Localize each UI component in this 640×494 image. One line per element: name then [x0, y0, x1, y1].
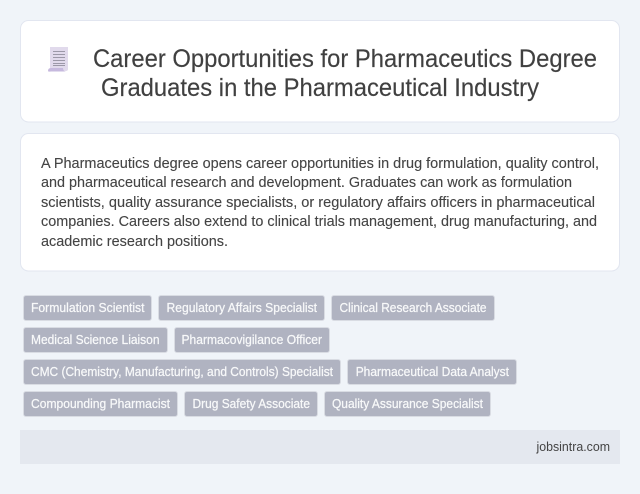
text block: description: academic research positions. — [41, 233, 228, 250]
text block: description: scientists, quality assurance specialists, or regulatory affairs officers in pharmaceutical — [41, 194, 595, 211]
tag: Clinical Research Associate: Clinical Research Associate — [340, 300, 486, 315]
tag: Pharmaceutical Data Analyst — [348, 360, 516, 384]
icon: document scroll — [48, 47, 68, 72]
tag: Clinical Research Associate — [332, 296, 494, 320]
text block: description: companies. Careers also extend to clinical trials management, drug manufacturing, and — [41, 213, 597, 230]
tag: Compounding Pharmacist: Compounding Pharmacist — [31, 396, 170, 411]
tag: Pharmaceutical Data Analyst: Pharmaceutical Data Analyst — [356, 364, 509, 379]
title: Career Opportunities for Pharmaceutics Degree — [93, 45, 597, 73]
text block: description: and pharmaceutical research and development. Graduates can work as formulation — [41, 174, 572, 191]
tag: Medical Science Liaison: Medical Science Liaison — [31, 332, 160, 347]
title: Graduates in the Pharmaceutical Industry — [101, 74, 539, 102]
tag: Formulation Scientist: Formulation Scientist — [31, 300, 145, 315]
panel: header — [20, 20, 620, 122]
tag: Pharmacovigilance Officer — [174, 328, 330, 352]
tag: Pharmacovigilance Officer: Pharmacovigilance Officer — [182, 332, 323, 347]
tag: CMC Specialist: CMC (Chemistry, Manufacturing, and Controls) Specialist — [31, 364, 333, 379]
tag: Medical Science Liaison — [24, 328, 168, 352]
tag: Quality Assurance Specialist: Quality Assurance Specialist — [332, 396, 483, 411]
text block: description: A Pharmaceutics degree opens career opportunities in drug formulation, quality control, — [41, 155, 599, 172]
tag: Formulation Scientist — [24, 296, 152, 320]
tags: career roles — [24, 296, 516, 416]
tag: Regulatory Affairs Specialist — [158, 296, 324, 320]
tag: Quality Assurance Specialist — [324, 392, 490, 416]
footer: jobsintra.com — [536, 440, 610, 454]
tag: Drug Safety Associate: Drug Safety Associate — [192, 396, 310, 411]
title — [93, 45, 597, 102]
tag: Regulatory Affairs Specialist: Regulatory Affairs Specialist — [166, 300, 317, 315]
panel: description — [20, 134, 620, 271]
tag: Drug Safety Associate — [184, 392, 318, 416]
tag: Compounding Pharmacist — [24, 392, 178, 416]
text block: description — [41, 155, 599, 250]
footer — [20, 430, 620, 464]
tag: CMC Specialist — [24, 360, 340, 384]
